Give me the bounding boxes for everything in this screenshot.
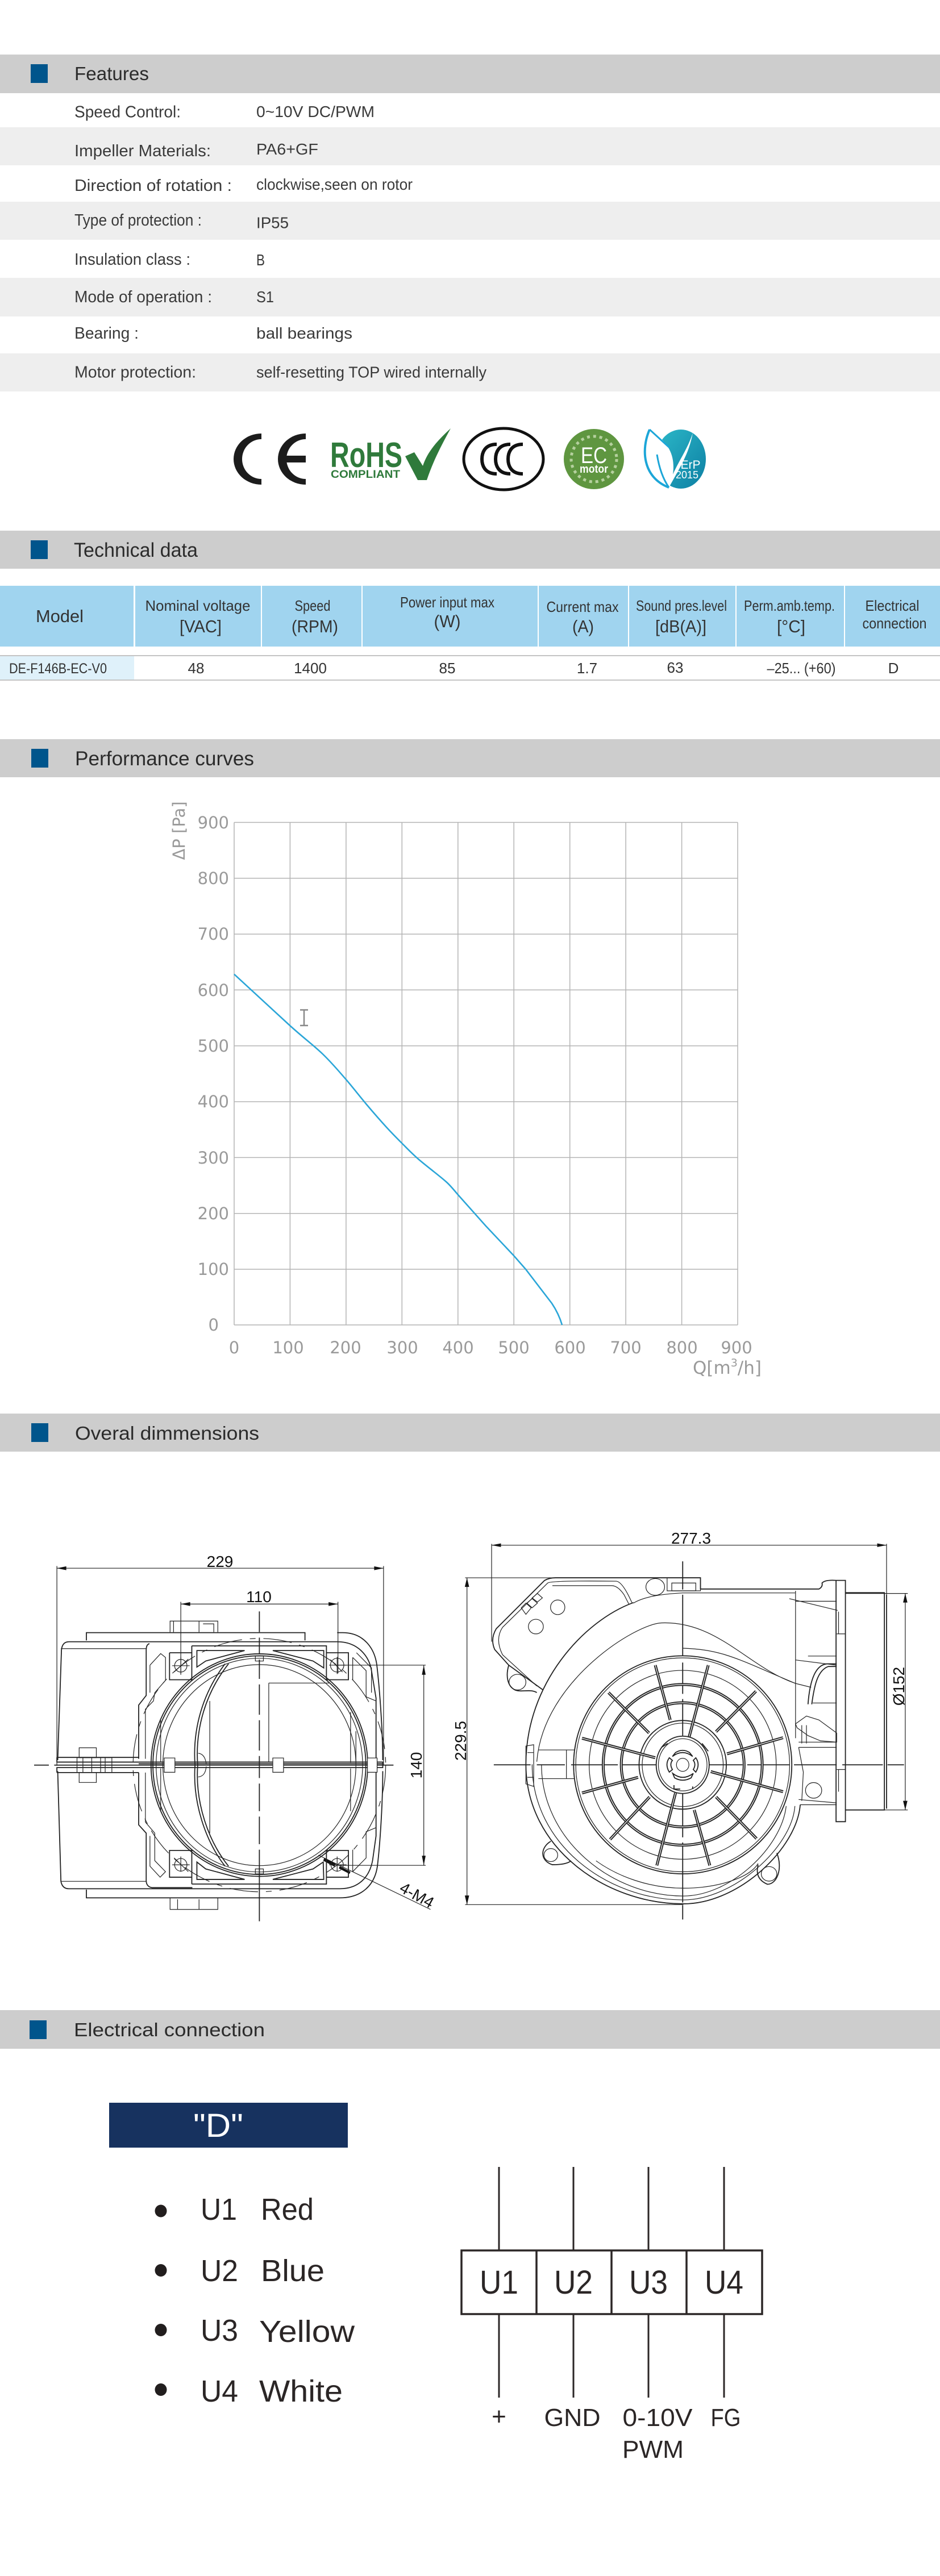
- fan grille spokes: [582, 1665, 783, 1865]
- y axis labels: 900: [198, 813, 229, 832]
- table data row: 85: [439, 660, 455, 677]
- centre lines: [34, 1611, 393, 1921]
- table header: [°C]: [777, 616, 805, 636]
- table header: Sound pres.level: [636, 597, 727, 614]
- terminal wiring diagram: [461, 2167, 762, 2464]
- top left bracket: [493, 1578, 701, 1690]
- feature row: type of protection: IP55: [256, 214, 289, 232]
- dimension: 229: 229: [207, 1553, 233, 1570]
- table header: Speed: [294, 597, 331, 614]
- feature row: direction of rotation: Direction of rotation :: [74, 177, 232, 195]
- fan grille rings: [573, 1656, 792, 1874]
- terminal block: U2: [554, 2264, 593, 2301]
- wire: U4 white: [155, 2374, 343, 2408]
- feature row: direction of rotation: [74, 176, 413, 195]
- wire: U3 yellow: [155, 2314, 355, 2349]
- table header: Electrical: [865, 597, 920, 614]
- feature row: type of protection: [0, 202, 940, 240]
- dimension lines: [465, 1543, 908, 1904]
- y axis labels: 700: [198, 924, 229, 944]
- dimension: 140: 140: [407, 1752, 425, 1778]
- wire: U4 white: U4: [201, 2374, 238, 2408]
- x axis labels: 700: [610, 1338, 642, 1357]
- panel: electrical connection: [0, 2010, 940, 2464]
- feature row: speed control: 0~10V DC/PWM: [256, 103, 375, 120]
- wire: U1 red: U1: [201, 2192, 237, 2227]
- centre lines: [494, 1561, 904, 1919]
- connection type badge: "D": [193, 2107, 243, 2144]
- x axis labels: 900: [721, 1338, 752, 1357]
- dimension: 277.3: 277.3: [671, 1529, 711, 1547]
- leader for mounting holes: [318, 1855, 430, 1910]
- heading: technical data: Technical data: [74, 539, 198, 561]
- table header: connection: [863, 615, 926, 632]
- certification logos: [234, 428, 706, 490]
- icon: RoHS compliant: RoHS: [330, 436, 402, 475]
- heading: technical data: [0, 531, 940, 569]
- feature row: motor protection: Motor protection:: [74, 364, 196, 382]
- table data row: 1400: [294, 660, 327, 677]
- terminal labels: 0-10V: [623, 2404, 693, 2432]
- wire: U1 red: [155, 2192, 314, 2227]
- performance curve: [234, 974, 562, 1325]
- icon: ErP 2015 leaf: [645, 430, 706, 489]
- heading: performance curves: Performance curves: [75, 748, 254, 770]
- feature row: mode of operation: Mode of operation :: [74, 288, 212, 306]
- x axis title: 3: [731, 1357, 738, 1369]
- feature row: impeller materials: [0, 127, 940, 165]
- icon: cursor marker: [300, 1010, 308, 1026]
- table data row: DE-F146B-EC-V0: [9, 661, 107, 677]
- x axis title: /h]: [738, 1358, 762, 1378]
- dimension: 229.5: 229.5: [452, 1721, 469, 1761]
- table data row: –25... (+60): [767, 660, 835, 677]
- y axis title: ΔP [Pa]: [169, 801, 189, 860]
- y axis labels: 800: [198, 869, 229, 888]
- table header: [dB(A)]: [655, 616, 706, 636]
- terminal block: U4: [705, 2264, 743, 2301]
- feature row: bearing: Bearing :: [74, 324, 139, 343]
- x axis labels: 300: [386, 1338, 418, 1357]
- feature row: mode of operation: [0, 278, 940, 316]
- icon: ErP 2015 leaf: ErP: [680, 458, 701, 472]
- fan hub: [656, 1736, 709, 1794]
- wire: U3 yellow: U3: [201, 2314, 238, 2348]
- drawing: blower inlet view: [34, 1553, 437, 1921]
- drawing: blower side view: [452, 1529, 908, 1919]
- y axis labels: 300: [198, 1148, 229, 1168]
- terminal labels: +: [492, 2403, 506, 2431]
- terminal block: U1: [480, 2264, 518, 2301]
- wire: U2 blue: [155, 2254, 325, 2288]
- inlet view line art: [34, 1566, 430, 1921]
- icon: EC motor badge: [564, 429, 624, 489]
- feature row: motor protection: [0, 353, 940, 391]
- panel: features: [0, 55, 940, 391]
- feature row: speed control: Speed Control:: [74, 103, 181, 122]
- x axis labels: 800: [666, 1338, 698, 1357]
- y axis labels: 0: [209, 1315, 219, 1335]
- table header: [0, 586, 940, 647]
- icon: RoHS compliant: COMPLIANT: [331, 469, 400, 481]
- y axis labels: [198, 813, 229, 1335]
- wire: U2 blue: Blue: [261, 2254, 325, 2288]
- terminal labels: [492, 2403, 741, 2464]
- y axis labels: 100: [198, 1260, 229, 1279]
- x axis title: Q[m: [693, 1358, 731, 1378]
- dimension: 4-M4: 4-M4: [397, 1879, 437, 1912]
- table data row: [0, 655, 940, 681]
- terminal labels: GND: [544, 2404, 600, 2432]
- wire: U4 white: White: [259, 2374, 343, 2408]
- x axis labels: 500: [498, 1338, 530, 1357]
- table header: [VAC]: [180, 616, 222, 636]
- panel: overall dimensions: [0, 1414, 940, 1921]
- dimension lines: [57, 1566, 426, 1865]
- feature row: speed control: [74, 103, 375, 122]
- panel: technical data: [0, 531, 940, 681]
- icon: RoHS compliant: [330, 428, 451, 481]
- heading: electrical connection: [0, 2010, 940, 2049]
- scroll housing: [526, 1593, 811, 1904]
- x axis labels: 600: [554, 1338, 586, 1357]
- chart grid: [234, 823, 738, 1325]
- feature row: motor protection: self-resetting TOP wired internally: [256, 364, 486, 381]
- terminal labels: PWM: [622, 2436, 684, 2464]
- heading: features: [0, 55, 940, 93]
- y axis labels: 600: [198, 981, 229, 1000]
- table data row: 1.7: [577, 660, 597, 677]
- table data row: D: [888, 660, 899, 677]
- connection type badge: [109, 2103, 348, 2148]
- outlet duct: [526, 1580, 887, 1821]
- feature row: direction of rotation: clockwise,seen on rotor: [256, 176, 413, 193]
- wires: [499, 2167, 724, 2398]
- wire: U1 red: Red: [261, 2192, 314, 2227]
- feature row: insulation class: [74, 251, 265, 269]
- terminal block: U3: [629, 2264, 668, 2301]
- table data row: 48: [188, 660, 204, 677]
- feature row: impeller materials: PA6+GF: [256, 140, 318, 158]
- wire: U3 yellow: Yellow: [259, 2315, 355, 2349]
- x axis labels: 200: [330, 1338, 361, 1357]
- mounting lugs: [508, 1665, 822, 1885]
- y axis labels: 500: [198, 1036, 229, 1056]
- dimension: diameter 152: Ø152: [890, 1667, 908, 1706]
- side view line art: [465, 1543, 908, 1919]
- x axis labels: 400: [442, 1338, 474, 1357]
- x axis labels: 100: [272, 1338, 304, 1357]
- heading: electrical connection: Electrical connection: [74, 2019, 265, 2040]
- feature row: mode of operation: S1: [256, 288, 274, 306]
- heading: overal dimmensions: [0, 1414, 940, 1452]
- dimension: 110: 110: [246, 1588, 272, 1606]
- feature row: impeller materials: Impeller Materials:: [74, 142, 211, 160]
- table header: Perm.amb.temp.: [744, 597, 835, 614]
- table data row: 63: [667, 659, 683, 676]
- terminal block: [461, 2250, 762, 2314]
- table header: Current max: [547, 598, 618, 615]
- feature row: insulation class: Insulation class :: [74, 251, 190, 269]
- housing outline: [58, 1621, 382, 1910]
- x axis labels: 0: [229, 1338, 239, 1357]
- table header: Power input max: [400, 594, 494, 611]
- x axis labels: [229, 1338, 752, 1357]
- chart: pressure vs airflow: [169, 801, 762, 1378]
- icon: EC motor badge: EC: [581, 443, 607, 468]
- panel: performance curves: [0, 739, 940, 1378]
- feature row: bearing: ball bearings: [256, 324, 352, 342]
- inlet rings: [133, 1639, 386, 1892]
- terminal labels: FG: [710, 2404, 741, 2432]
- table header: (W): [434, 611, 460, 631]
- table header: Nominal voltage: [145, 597, 250, 614]
- table header: Model: [36, 606, 84, 626]
- wire: U2 blue: U2: [201, 2254, 238, 2288]
- wire colour list: [155, 2192, 355, 2408]
- heading: features: Features: [74, 63, 149, 84]
- feature row: bearing: [74, 324, 352, 343]
- icon: CE mark: [234, 433, 306, 485]
- mounting frame: [139, 1644, 376, 1887]
- feature row: type of protection: Type of protection :: [74, 211, 202, 230]
- table header: (RPM): [292, 616, 338, 636]
- icon: ErP 2015 leaf: 2015: [676, 469, 698, 481]
- table header: (A): [572, 616, 594, 636]
- heading: overal dimmensions: Overal dimmensions: [75, 1423, 259, 1444]
- y axis labels: 400: [198, 1092, 229, 1111]
- icon: CCC mark: [464, 428, 543, 490]
- feature row: insulation class: B: [256, 251, 265, 269]
- heading: performance curves: [0, 739, 940, 777]
- y axis labels: 200: [198, 1204, 229, 1223]
- centre seam and clamps: [57, 1748, 382, 1782]
- icon: EC motor badge: motor: [580, 463, 608, 476]
